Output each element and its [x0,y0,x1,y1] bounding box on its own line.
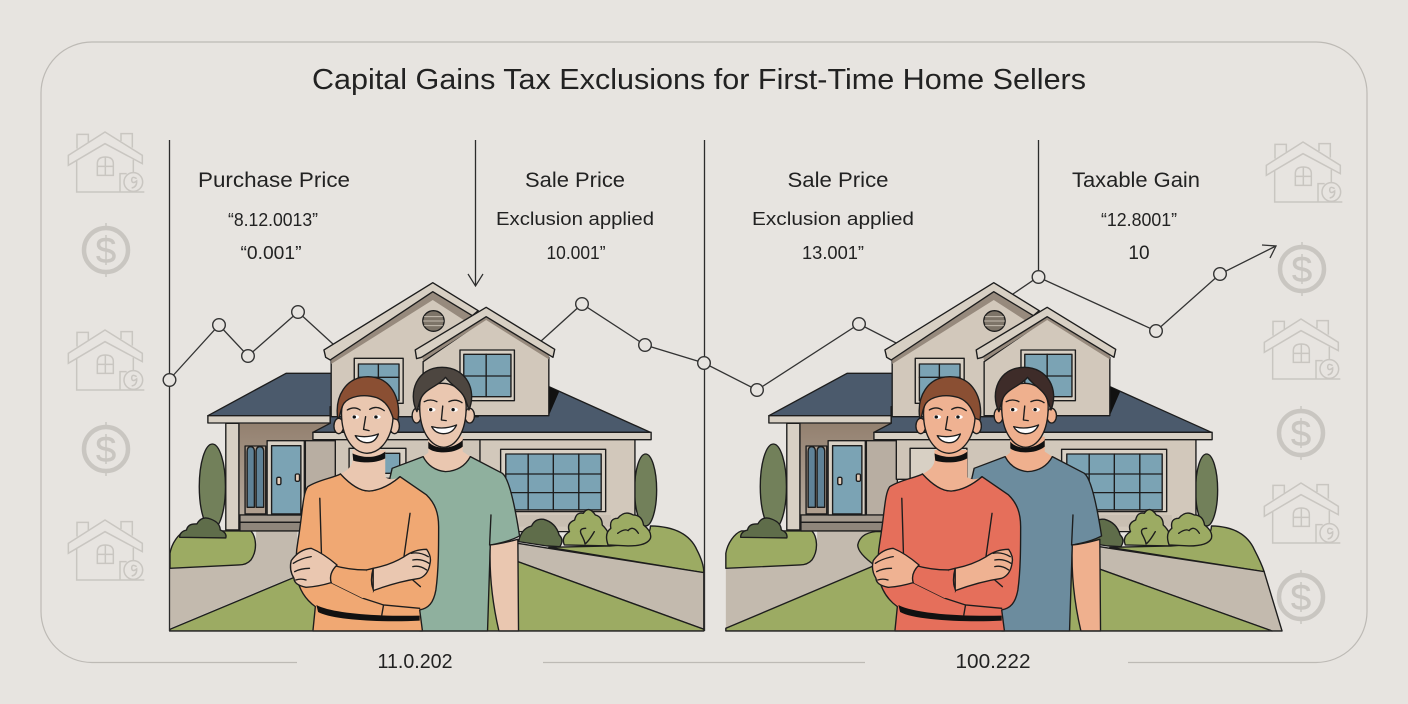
bottom label left: 11.0.202 [378,651,452,673]
column: purchase price: Purchase Price [198,169,350,192]
icon: house 3 [68,520,144,580]
column: sale price: Sale Price [525,169,625,192]
house [180,283,657,538]
column: taxable gain: Taxable Gain [1072,169,1200,192]
bottom label right: 100.222 [956,651,1030,673]
icon: house 3 [1264,483,1340,543]
arrow head [1262,245,1276,258]
bushes [519,510,651,547]
icon: house [1266,142,1342,202]
house [741,283,1218,538]
icon: dollar coin 2 [84,422,128,476]
column: sale price 2: Exclusion applied [752,209,914,229]
column: sale price 2: Sale Price [788,169,888,192]
icon: house 2 [1264,319,1340,379]
title: Capital Gains Tax Exclusions for First-Time Home Sellers [312,64,1086,96]
column: purchase price [198,169,350,263]
left scene: house with couple [170,283,704,631]
column: taxable gain: “12.8001” [1101,210,1177,230]
axes and dividers [163,140,1282,631]
icon: dollar coin [1280,242,1324,296]
icon: house 2 [68,330,144,390]
rear person [959,367,1102,631]
column: taxable gain: 10 [1128,243,1150,264]
left icon column [68,132,144,580]
column: purchase price: “8.12.0013” [228,210,318,230]
bushes [1080,510,1212,547]
column: sale price 2: 13.001” [802,243,864,263]
column: taxable gain [1072,169,1200,264]
icon: house [68,132,144,192]
icon: dollar coin 3 [1279,570,1323,624]
icon: dollar coin [84,223,128,277]
right scene: house with couple [726,283,1282,631]
column: sale price: Exclusion applied [496,209,654,229]
right icon column [1264,142,1342,624]
couple [290,367,520,631]
column: sale price: 10.001” [546,243,606,263]
column: sale price 2 [752,169,914,263]
line chart behind the houses [169,245,1276,396]
column: sale price [496,169,654,263]
icon: dollar coin 2 [1279,406,1323,460]
front person [872,377,1021,631]
column: purchase price: “0.001” [240,243,302,263]
